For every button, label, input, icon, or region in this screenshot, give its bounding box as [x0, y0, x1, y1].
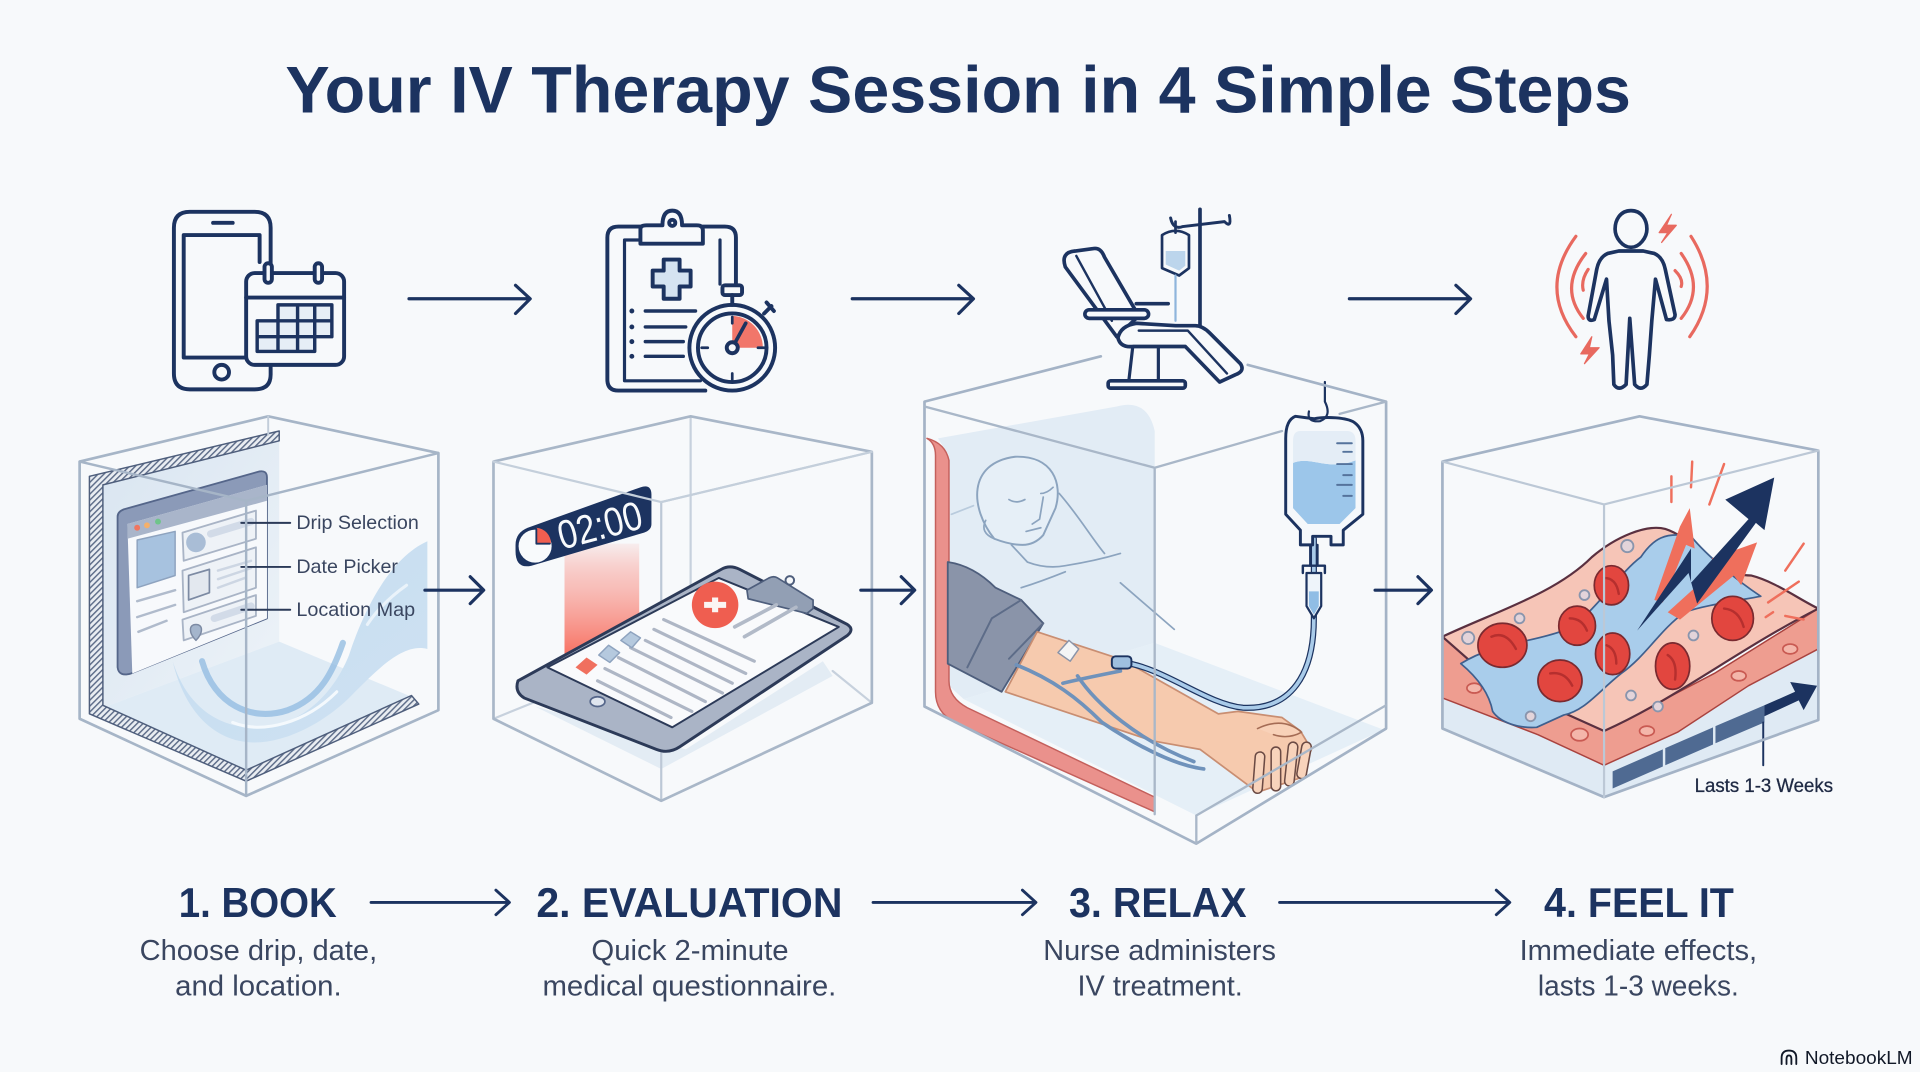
step 2 description [542, 935, 836, 1002]
lower tissue layer [1442, 609, 1818, 765]
red blood cells [1478, 566, 1753, 702]
fingers [1258, 747, 1307, 789]
step 3 description [1043, 935, 1276, 1002]
water swirl [173, 541, 427, 743]
arrow: box 2 to box 3 [861, 577, 915, 604]
panel: step 1 booking box: Location Map [296, 599, 415, 621]
step 4 description: Immediate effects, [1520, 935, 1757, 967]
back wall [938, 405, 1155, 699]
callout labels [241, 523, 290, 610]
panel: step 2 evaluation box: 02:00 [552, 492, 647, 558]
glass box outline [493, 416, 872, 801]
pale cells [1462, 540, 1698, 721]
IV drip chamber [1307, 573, 1321, 618]
floor [964, 643, 1384, 815]
patient outline [951, 457, 1174, 629]
arrow: book to evaluation [409, 285, 530, 313]
step 3 heading: 3. RELAX [1069, 879, 1247, 926]
duration callout [1762, 722, 1764, 765]
sleeve [948, 562, 1043, 692]
energy sparks [1671, 462, 1804, 620]
watermark: NotebookLM [1805, 1047, 1913, 1068]
back wall [102, 438, 279, 708]
IV bag [1286, 416, 1363, 545]
dark bolt arrow [1637, 478, 1774, 631]
step 1 description: Choose drip, date, [140, 935, 377, 967]
tape [1058, 640, 1079, 661]
red burst arrows [1654, 508, 1695, 602]
icon: IV chair and pole [1064, 209, 1242, 388]
step 2 heading: 2. EVALUATION [536, 879, 842, 926]
tissue top surface [1442, 528, 1818, 731]
title: Your IV Therapy Session in 4 Simple Steps [285, 54, 1631, 128]
red medical badge [692, 582, 738, 628]
duration bars [1613, 705, 1764, 789]
clip [747, 577, 813, 613]
step 1 heading: 1. BOOK [179, 879, 337, 926]
tablet screen [547, 578, 839, 727]
glass box outline [80, 416, 438, 796]
icon: phone and calendar [174, 212, 344, 389]
step 2 description: Quick 2-minute [591, 935, 789, 967]
arrow: box 3 to box 4 [1375, 577, 1431, 604]
arrow: heading 1 to 2 [371, 890, 509, 915]
panel: step 3 relax box [924, 356, 1386, 844]
arrow: evaluation to relax [852, 285, 973, 313]
panel: step 4 feel it box [1442, 416, 1833, 797]
glass box outline [924, 356, 1386, 844]
tablet body [517, 567, 851, 751]
panel: step 4 feel it box: Lasts 1-3 Weeks [1695, 776, 1833, 797]
step 3 description: IV treatment. [1078, 970, 1243, 1002]
IV tube [1123, 539, 1314, 708]
step 4 description [1520, 935, 1757, 1002]
timer badge [516, 486, 651, 566]
step 1 description: and location. [175, 970, 342, 1002]
arrow: relax to feel it [1349, 285, 1471, 313]
arrow: box 1 to box 2 [425, 577, 484, 604]
icon: person with energy [1557, 211, 1707, 388]
step 2 description: medical questionnaire. [542, 970, 836, 1002]
arrow: heading 2 to 3 [873, 890, 1036, 915]
glass box outline [1442, 416, 1818, 797]
blue plasma pool [1461, 535, 1761, 727]
veins [1016, 665, 1204, 769]
form lines [735, 605, 796, 637]
back edges [493, 416, 872, 719]
icon: clipboard and stopwatch [607, 211, 775, 391]
panel: step 1 booking box: Drip Selection [296, 512, 419, 534]
floor [1442, 637, 1818, 797]
panel: step 1 booking box: Date Picker [296, 556, 398, 578]
floor [103, 642, 411, 770]
arm and hand [1005, 632, 1311, 792]
step 3 description: Nurse administers [1043, 935, 1276, 967]
panel: step 1 booking box [80, 416, 438, 796]
red beam [565, 544, 639, 667]
red wall strip [927, 438, 1155, 812]
step 4 heading: 4. FEEL IT [1544, 879, 1734, 926]
hatched wall edge [89, 431, 419, 781]
panel: step 2 evaluation box [493, 416, 872, 801]
step 1 description [140, 935, 377, 1002]
browser window [118, 471, 267, 674]
floor shadow [535, 661, 833, 769]
arrow: heading 3 to 4 [1280, 890, 1510, 915]
step 4 description: lasts 1-3 weeks. [1538, 970, 1739, 1002]
